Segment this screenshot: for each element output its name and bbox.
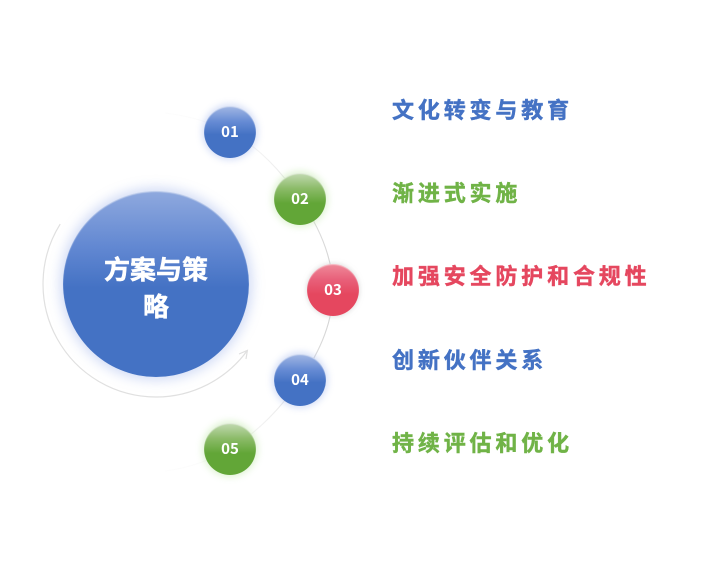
node 02: 02: [291, 188, 309, 209]
node 04: 04: [291, 369, 309, 390]
node 02: [274, 173, 326, 225]
label 01: 文化转变与教育: [392, 98, 573, 123]
label 02: 渐进式实施: [392, 181, 521, 206]
node 03: 03: [324, 279, 342, 300]
node 04: [274, 354, 326, 406]
label 04: 创新伙伴关系: [392, 348, 547, 373]
node 03: [307, 264, 359, 316]
node 05: [204, 423, 256, 475]
main circle: [63, 191, 249, 377]
node 01: [204, 106, 256, 158]
main title: 方案与策略: [104, 255, 208, 322]
orbit arrow around main circle: [43, 224, 247, 397]
connecting arc through nodes: [165, 113, 333, 471]
node 05: 05: [221, 438, 239, 459]
label 03: 加强安全防护和合规性: [392, 264, 651, 289]
node 01: 01: [221, 121, 239, 142]
label 05: 持续评估和优化: [392, 431, 573, 456]
